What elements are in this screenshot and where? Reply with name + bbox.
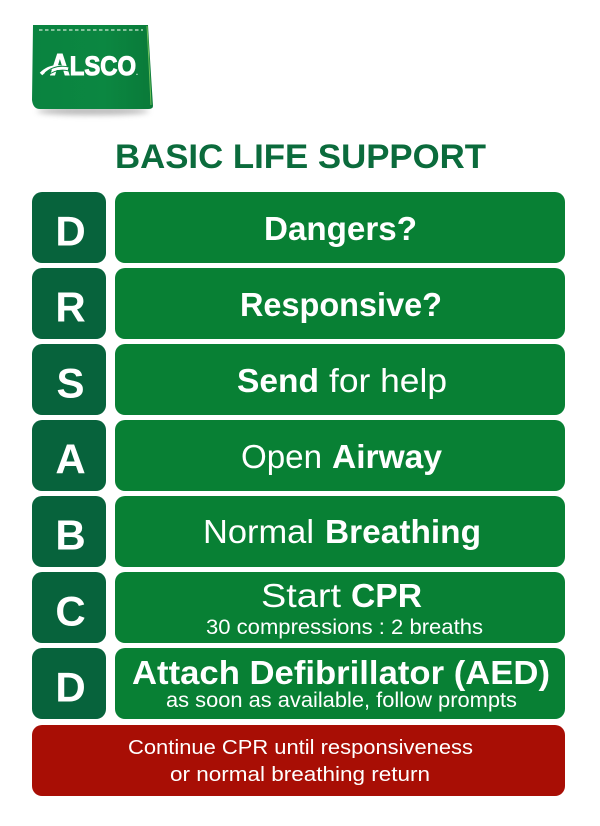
letter D: D — [55, 664, 86, 710]
Open Airway panel — [115, 420, 565, 491]
Normal Breathing panel: Breathing — [325, 514, 481, 551]
row: D Attach Defibrillator — [32, 648, 565, 719]
letter R — [32, 268, 106, 339]
callout: continue CPR — [32, 725, 565, 796]
row: D Dangers — [32, 192, 565, 263]
Dangers panel: Dangers? — [264, 211, 417, 248]
letter A: A — [55, 436, 86, 482]
letter C — [32, 572, 106, 643]
Open Airway panel: Open — [241, 439, 322, 476]
letter R: R — [55, 284, 86, 330]
title: BASIC LIFE SUPPORT — [115, 138, 486, 176]
Start CPR panel: Start — [261, 578, 342, 615]
callout: continue CPR: or normal breathing return — [170, 763, 430, 786]
Send for help panel: Send — [237, 363, 319, 400]
row: A Open Airway — [32, 420, 565, 491]
Start CPR panel: CPR — [351, 578, 422, 615]
letter S — [32, 344, 106, 415]
letter B — [32, 496, 106, 567]
logo: Alsco tag: ALSCO. — [50, 47, 138, 82]
letter S: S — [56, 360, 85, 406]
Start CPR panel: 30 compressions : 2 breaths — [206, 615, 483, 639]
letter D — [32, 192, 106, 263]
Open Airway panel: Airway — [332, 439, 442, 476]
Attach Defibrillator panel — [115, 648, 565, 719]
row: B Normal Breathing — [32, 496, 565, 567]
Attach Defibrillator panel: as soon as available, follow prompts — [166, 688, 517, 712]
row: R Responsive — [32, 268, 565, 339]
Responsive panel: Responsive? — [240, 287, 442, 324]
letter C: C — [55, 588, 86, 634]
letter A — [32, 420, 106, 491]
letter D: D — [55, 208, 86, 254]
Send for help panel: for help — [329, 363, 447, 400]
letter B: B — [55, 512, 86, 558]
Start CPR panel — [115, 572, 565, 643]
Send for help panel — [115, 344, 565, 415]
Responsive panel — [115, 268, 565, 339]
Normal Breathing panel: Normal — [203, 514, 314, 551]
row: S Send for help — [32, 344, 565, 415]
logo: Alsco tag — [32, 25, 153, 115]
letter D — [32, 648, 106, 719]
row: C Start CPR — [32, 572, 565, 643]
Attach Defibrillator panel: Attach Defibrillator (AED) — [132, 655, 550, 692]
Dangers panel — [115, 192, 565, 263]
Normal Breathing panel — [115, 496, 565, 567]
callout: continue CPR: Continue CPR until responsiveness — [128, 736, 473, 759]
